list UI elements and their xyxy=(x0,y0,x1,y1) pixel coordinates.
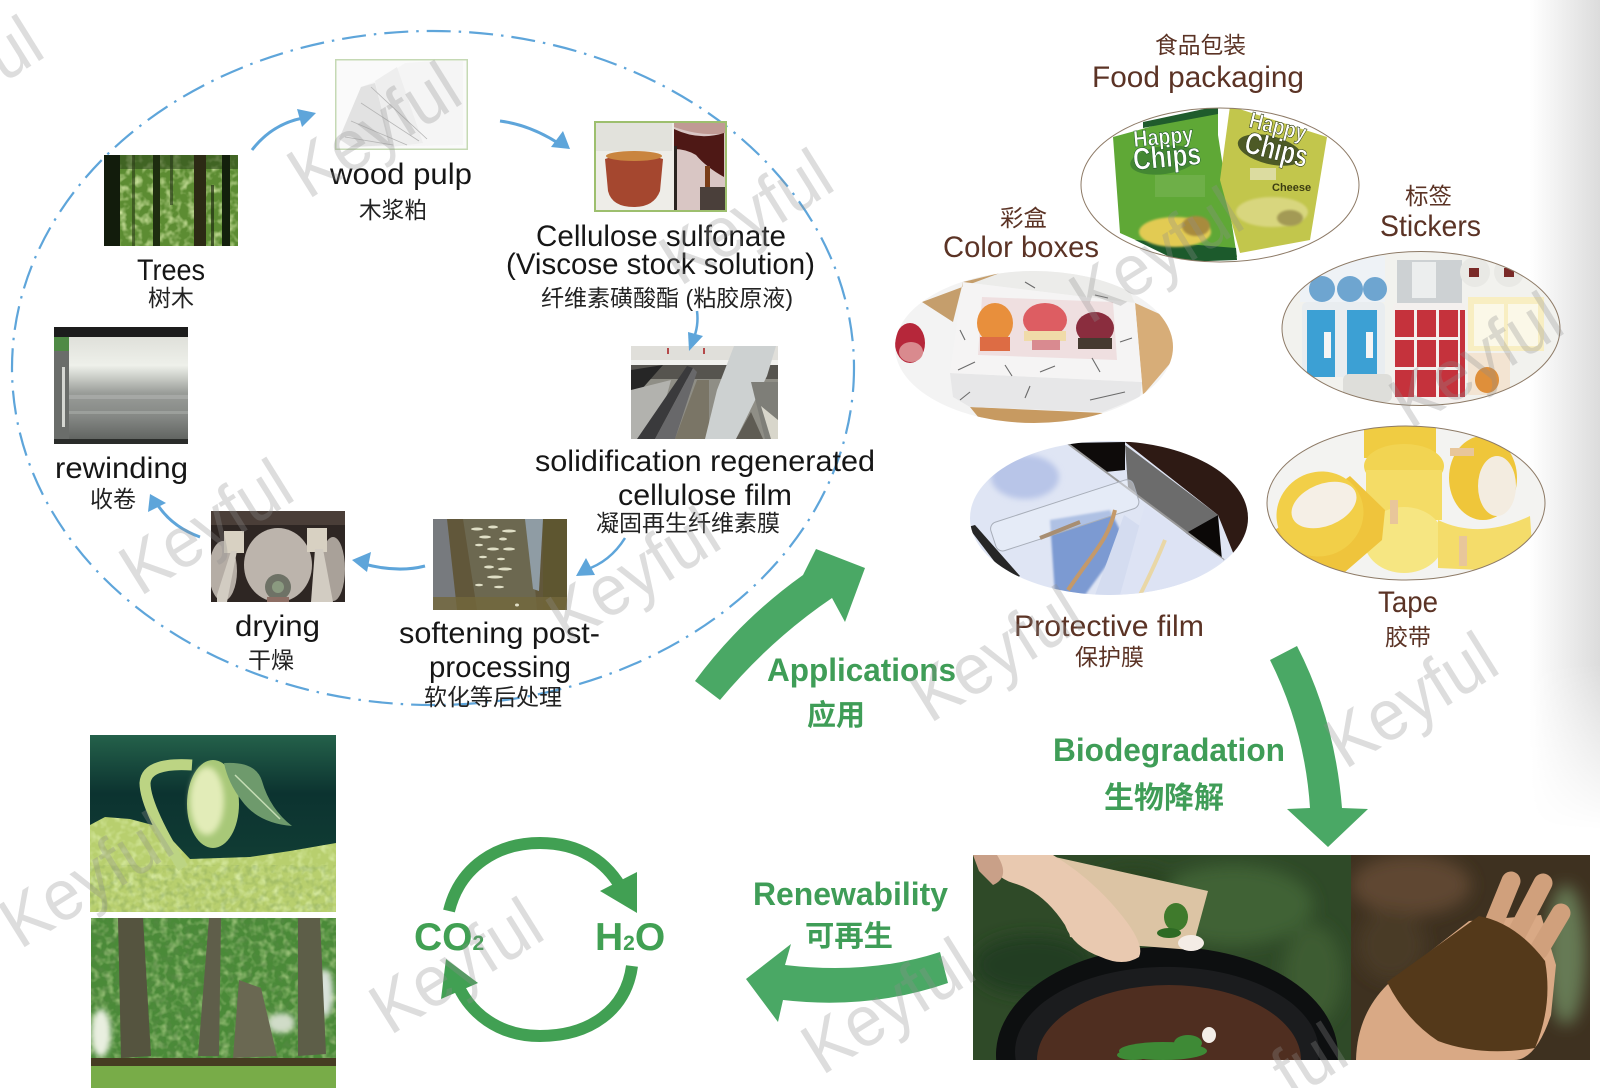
label: 食品包装: 食品包装 xyxy=(1155,32,1246,58)
watermarks: Keyful xyxy=(1376,277,1576,444)
heading: 应用: 应用 xyxy=(807,699,865,732)
watermarks: Keyful xyxy=(646,134,846,301)
application: color boxes xyxy=(895,205,1173,423)
label: Protective film: Protective film xyxy=(1014,610,1204,643)
label: 凝固再生纤维素膜: 凝固再生纤维素膜 xyxy=(596,510,780,536)
label: Color boxes: Color boxes xyxy=(943,231,1099,264)
watermarks: Keyful xyxy=(274,47,474,214)
photo: compost bucket xyxy=(973,855,1351,1060)
arrow: top cycle arc xyxy=(449,843,637,913)
watermarks: Keyful xyxy=(896,571,1096,738)
step: drying xyxy=(209,511,345,673)
application: protective film xyxy=(968,441,1248,670)
photo oval: chips bags: Happy xyxy=(1247,107,1310,146)
heading: Applications xyxy=(767,652,956,732)
photo: viscose solution xyxy=(594,121,727,212)
label: processing: processing xyxy=(429,651,571,684)
photo oval: chips bags: Chips xyxy=(1132,136,1202,177)
photo oval: sticker rolls xyxy=(1282,252,1560,406)
label: rewinding: rewinding xyxy=(55,452,188,485)
process cycle dashed ellipse xyxy=(12,31,854,705)
label: 标签: 标签 xyxy=(1405,183,1452,209)
label: softening post-: softening post- xyxy=(399,617,600,650)
watermarks: Keyful xyxy=(106,444,306,611)
label: wood pulp: wood pulp xyxy=(329,158,472,191)
pack text: Happy xyxy=(1132,121,1194,152)
label: 彩盒: 彩盒 xyxy=(1000,205,1047,231)
watermarks: Keyful xyxy=(356,883,556,1050)
photo: trees xyxy=(104,155,238,246)
application: stickers xyxy=(1282,183,1560,406)
arrow: wood pulp to cellulose xyxy=(500,121,570,149)
photo: seedling xyxy=(90,735,336,912)
label: 木浆粕: 木浆粕 xyxy=(359,197,427,223)
step: softening xyxy=(399,519,600,710)
heading: Applications: Applications xyxy=(767,652,956,688)
label: 干燥: 干燥 xyxy=(248,647,294,673)
watermarks: Keyful xyxy=(1311,617,1511,784)
label: CO2: CO2 xyxy=(414,916,484,959)
arrow: softening to drying xyxy=(352,552,425,572)
heading: 可再生: 可再生 xyxy=(805,920,893,953)
heading: 生物降解: 生物降解 xyxy=(1104,782,1224,815)
label: cellulose film: cellulose film xyxy=(618,479,792,512)
photo oval: chips bags: Chips xyxy=(1241,125,1312,174)
photo oval: tape rolls xyxy=(1261,426,1545,580)
label: drying: drying xyxy=(235,610,320,643)
arrow: drying to rewinding xyxy=(148,494,200,537)
panel: applications xyxy=(895,32,1560,670)
photo: hand holding compost xyxy=(1351,855,1590,1060)
photo: forest xyxy=(91,918,336,1088)
photo oval: chips bags xyxy=(1081,106,1359,262)
watermarks: Keyful xyxy=(1056,172,1256,339)
screenshot edge shadow xyxy=(1546,0,1600,790)
application: tape xyxy=(1261,426,1545,650)
label: 收卷: 收卷 xyxy=(90,486,136,512)
label: 胶带: 胶带 xyxy=(1385,624,1431,650)
heading: Renewability xyxy=(753,876,948,953)
heading: Biodegradation: Biodegradation xyxy=(1053,732,1285,768)
watermarks: Keyful xyxy=(533,492,733,659)
application: food packaging xyxy=(1081,32,1359,262)
photo oval: chips bags: Cheese xyxy=(1272,182,1311,194)
arrow: renewability xyxy=(746,944,948,1022)
step: solidification xyxy=(535,346,875,536)
label: 软化等后处理: 软化等后处理 xyxy=(424,684,562,710)
label: Food packaging: Food packaging xyxy=(1092,61,1304,94)
label: Cellulose sulfonate: Cellulose sulfonate xyxy=(536,220,786,253)
arrow: biodegradation xyxy=(1270,646,1368,847)
photo: solidification bath xyxy=(631,346,778,439)
panel: process cycle xyxy=(54,59,875,710)
arrow: applications xyxy=(695,549,865,700)
arrow: trees to wood pulp xyxy=(252,109,316,150)
diagram: CO2 and H2O cycle xyxy=(414,843,665,1036)
step: wood pulp xyxy=(329,59,472,223)
step: trees xyxy=(104,155,238,311)
label: solidification regenerated: solidification regenerated xyxy=(535,445,875,478)
watermarks: Keyful xyxy=(788,923,988,1088)
heading: Biodegradation xyxy=(1053,732,1285,815)
arrow: cellulose to solidification xyxy=(688,311,703,351)
heading: Renewability: Renewability xyxy=(753,876,948,912)
arrow: solidification to softening xyxy=(576,538,625,576)
label: 保护膜: 保护膜 xyxy=(1075,644,1144,670)
label: 树木: 树木 xyxy=(148,285,194,311)
label: Viscose stock solution: (Viscose stock solution) xyxy=(506,248,815,281)
step: cellulose sulfonate xyxy=(506,121,815,311)
label: Tape: Tape xyxy=(1378,586,1438,619)
arrow: bottom cycle arc xyxy=(441,959,632,1036)
label: Trees: Trees xyxy=(137,254,205,287)
photo oval: cupcake box xyxy=(895,271,1173,423)
photo: softening bath xyxy=(433,519,567,610)
photo: drying rollers xyxy=(211,511,345,602)
label: Stickers: Stickers xyxy=(1380,210,1481,243)
photo oval: phone case film xyxy=(968,441,1248,595)
photo: rewinding roll xyxy=(54,327,188,444)
photo: wood pulp xyxy=(335,59,468,150)
step: rewinding xyxy=(54,327,188,512)
label: H2O: H2O xyxy=(595,916,665,959)
label: 纤维素磺酸酯: 纤维素磺酸酯 (粘胶原液) xyxy=(541,285,793,311)
